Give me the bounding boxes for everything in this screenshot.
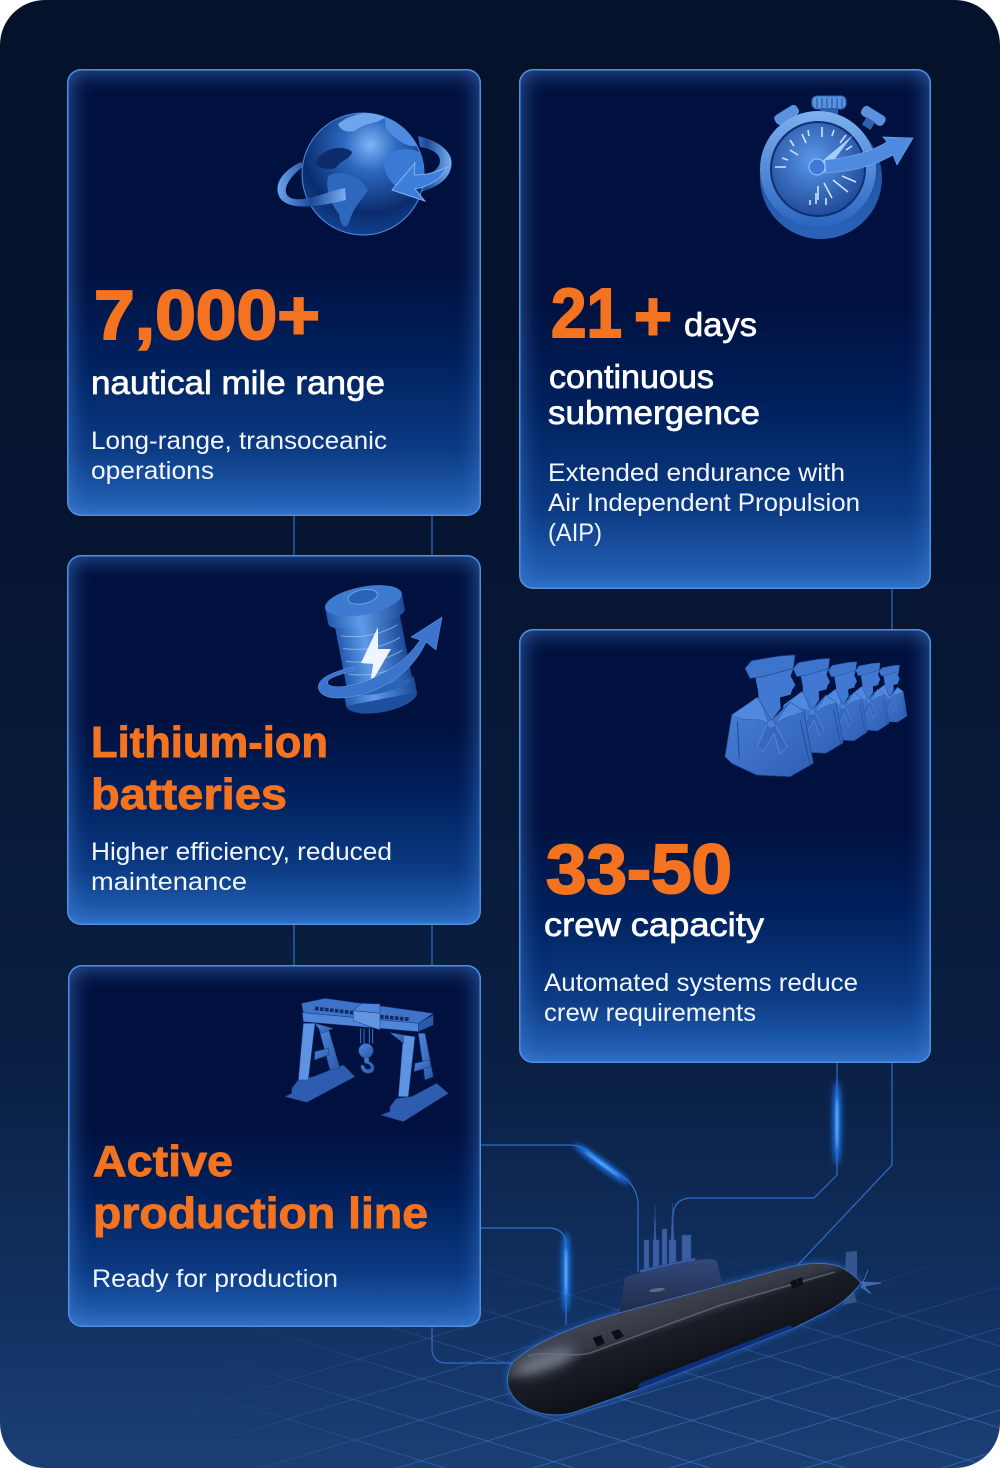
heading: Active production line: production line [93, 1189, 428, 1238]
panel: nautical range [67, 69, 481, 516]
stat: plus sign: + [634, 277, 672, 355]
description: efficiency [91, 838, 392, 896]
panel: production line [68, 965, 481, 1327]
panel: crew [519, 629, 931, 1063]
hull [507, 1263, 861, 1415]
description: efficiency: maintenance [91, 868, 247, 896]
label: days: days [684, 306, 757, 343]
icon: globe with orbit arrow [277, 113, 452, 235]
description: range [91, 427, 387, 485]
label: continuous submergence: continuous [549, 358, 714, 395]
description: endurance: Air Independent Propulsion [548, 489, 860, 517]
hull glow [507, 1263, 861, 1415]
description: ready: Ready for production [92, 1265, 338, 1293]
heading: Active production line: Active [93, 1137, 233, 1186]
description: automation: crew requirements [544, 999, 756, 1027]
stat: 33-50: 33-50 [546, 830, 732, 908]
heading: Lithium-ion batteries: batteries [91, 770, 287, 819]
description: endurance: Extended endurance with [548, 459, 845, 487]
description: range: operations [91, 457, 214, 485]
icon: stopwatch with arrow [760, 96, 913, 239]
description: automation: Automated systems reduce [544, 969, 858, 997]
panel: batteries [67, 555, 481, 925]
description: automation [544, 969, 858, 1027]
label: nautical mile range: nautical mile range [91, 364, 385, 401]
label: continuous submergence [548, 358, 760, 431]
stat: 7,000+: 7,000+ [94, 276, 320, 354]
illustration: submarine [502, 1203, 881, 1420]
heading: Active production line [93, 1137, 428, 1238]
icon: gantry crane [285, 998, 448, 1122]
masts [640, 1203, 695, 1276]
description: endurance: (AIP) [548, 519, 602, 547]
connector glows [562, 1081, 841, 1312]
floor grid [224, 1254, 1000, 1468]
description: efficiency: Higher efficiency, reduced [91, 838, 392, 866]
heading: Lithium-ion batteries [91, 718, 328, 819]
icon: row of sailors [725, 655, 907, 777]
panel: submergence [519, 69, 931, 589]
description: range: Long-range, transoceanic [91, 427, 387, 455]
fins and propeller [843, 1251, 881, 1305]
heading: Lithium-ion batteries: Lithium-ion [91, 718, 328, 767]
conning tower [619, 1259, 724, 1317]
description: endurance [548, 459, 860, 547]
label: crew capacity: crew capacity [544, 906, 765, 943]
label: continuous submergence: submergence [548, 394, 760, 431]
icon: battery with arrow [318, 580, 442, 719]
stat: 21+: 21 [551, 274, 622, 352]
deck hatches [593, 1277, 803, 1347]
hull shading [512, 1272, 835, 1390]
